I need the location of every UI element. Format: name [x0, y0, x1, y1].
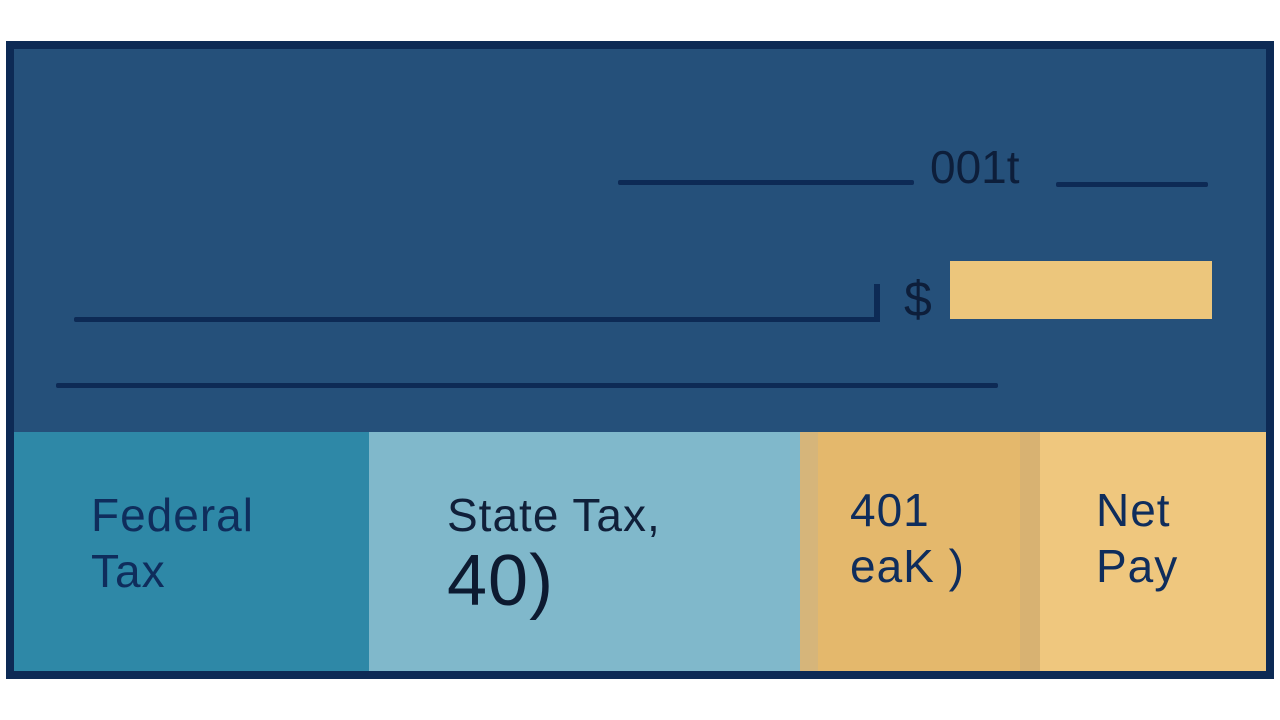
- label: 401k: 401: [850, 484, 930, 536]
- label: federal tax: Federal: [91, 489, 254, 541]
- line: amount words line: [56, 383, 998, 388]
- label: federal tax: Tax: [91, 545, 166, 597]
- label: 401k: [850, 484, 965, 592]
- label: state tax: 40): [447, 541, 554, 621]
- tick mark: [874, 284, 880, 322]
- label: net pay: [1096, 484, 1178, 592]
- label: 401k: eaK ): [850, 540, 965, 592]
- line: top right right segment: [1056, 182, 1208, 187]
- text: dollar sign: $: [904, 271, 932, 327]
- segment: state tax: [369, 432, 800, 671]
- segment: 401k: [800, 432, 1020, 671]
- line: top right left segment: [618, 180, 914, 185]
- line: payee line: [74, 317, 880, 322]
- deduction bar: [14, 432, 1266, 671]
- segment: net pay: [1020, 432, 1266, 671]
- label: net pay: Pay: [1096, 540, 1178, 592]
- label: state tax: [447, 489, 661, 621]
- label: state tax: State Tax,: [447, 489, 661, 541]
- text: 001t label: 001t: [930, 141, 1020, 193]
- label: federal tax: [91, 489, 254, 597]
- label: net pay: Net: [1096, 484, 1171, 536]
- segment: federal tax: [14, 432, 369, 671]
- amount box: [950, 261, 1212, 319]
